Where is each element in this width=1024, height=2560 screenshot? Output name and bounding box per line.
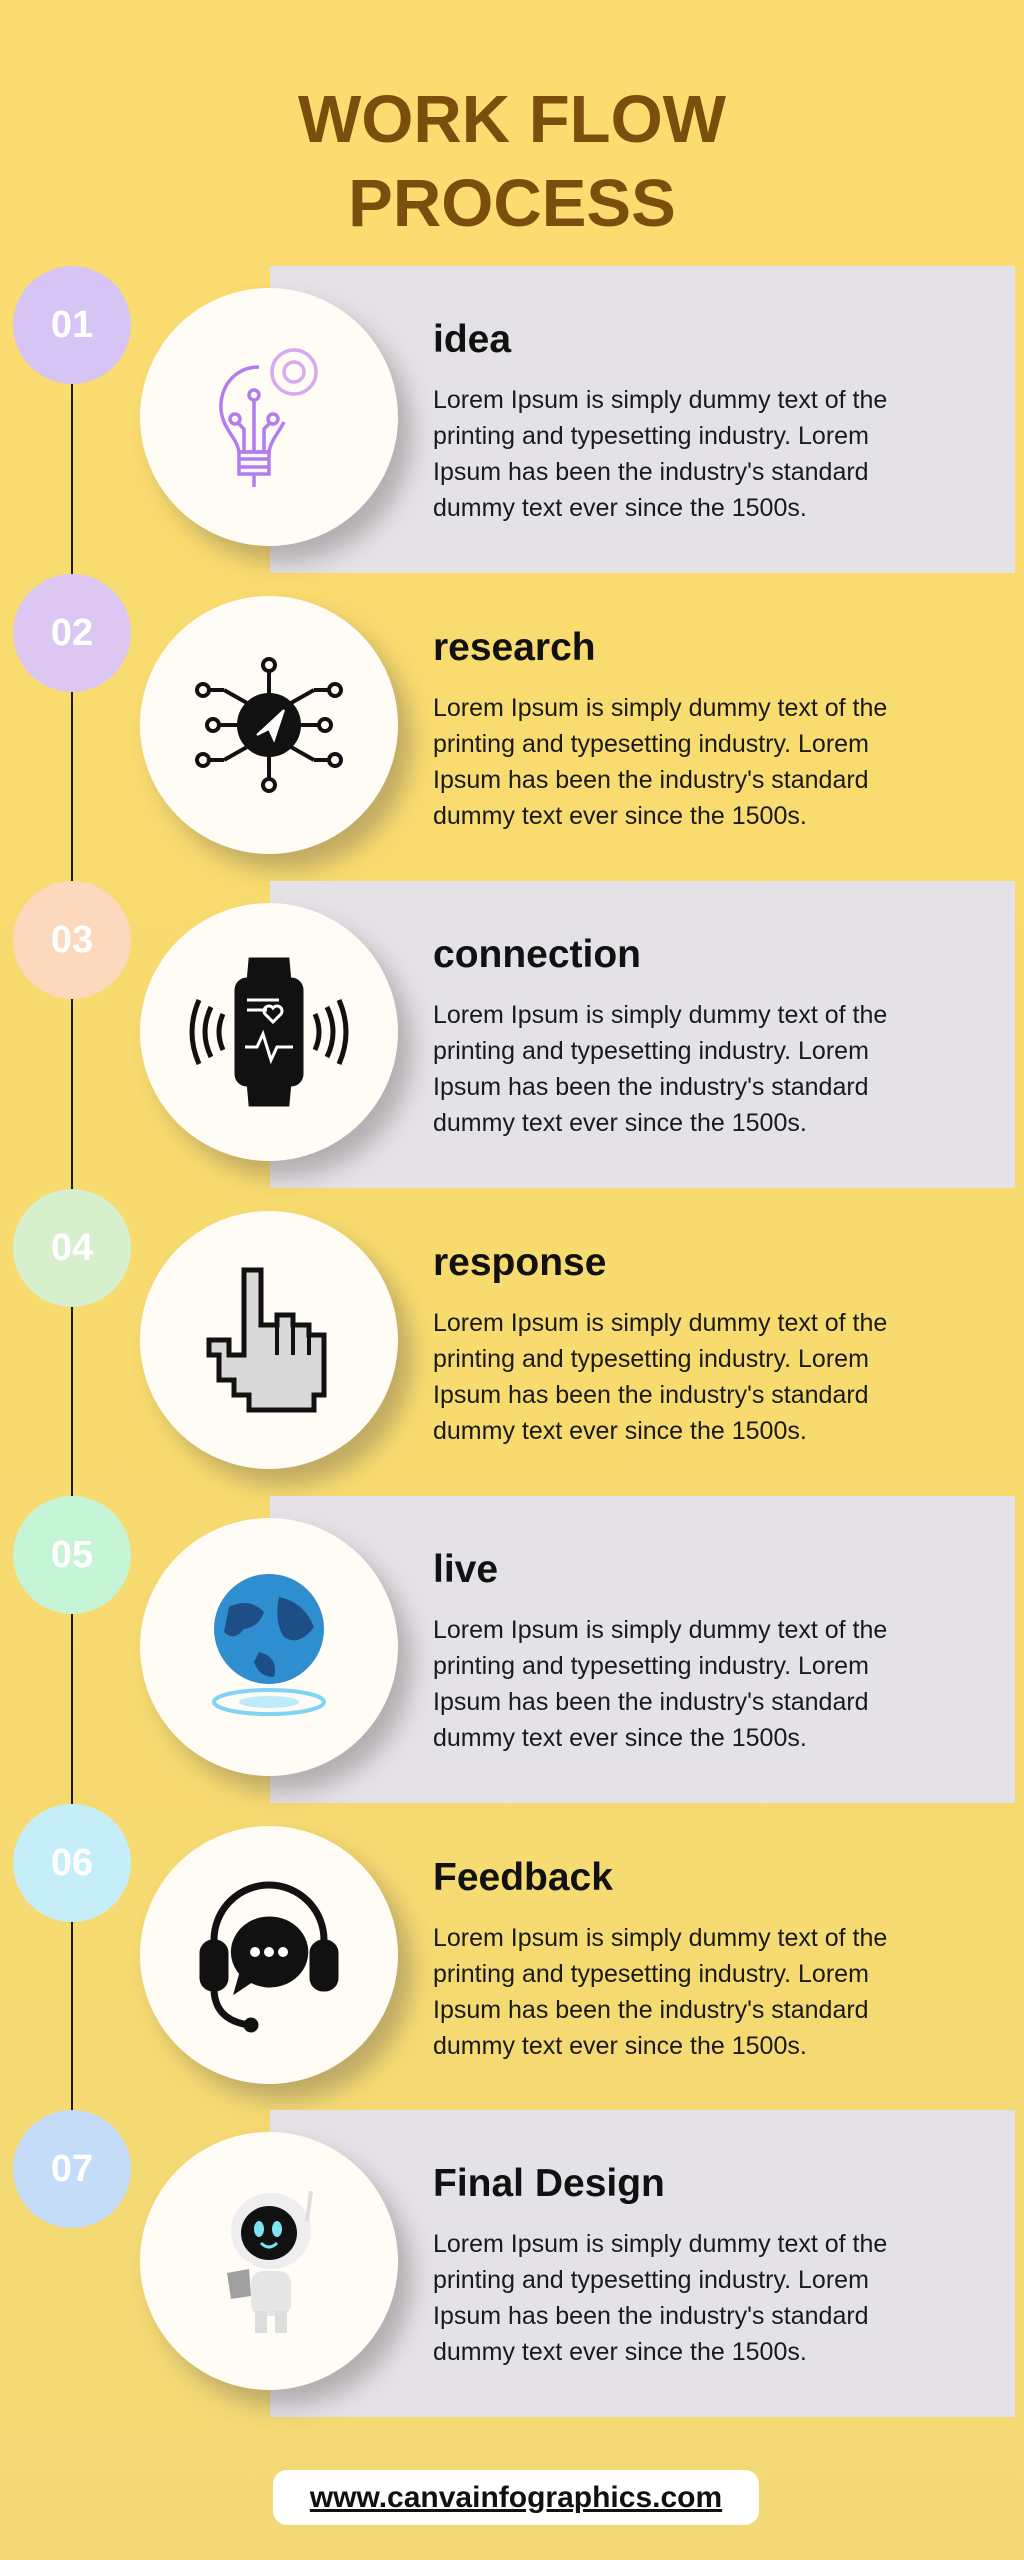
icon: smartwatch [140,903,398,1161]
number badge 01 [13,266,131,384]
heading: research [433,626,596,668]
number badge 03: 03 [51,919,93,961]
heading: Final Design [433,2162,665,2205]
body text: Lorem Ipsum is simply dummy text of the printing and typesetting industry. Lorem Ipsum has been the industry's standard dummy text ever since the 1500s. [433,1616,887,1752]
body text: Lorem Ipsum is simply dummy text of the printing and typesetting industry. Lorem Ipsum has been the industry's standard dummy text ever since the 1500s. [433,386,887,522]
heading: idea [433,318,511,361]
heading: Feedback [433,1856,613,1898]
number badge 02 [13,574,131,692]
number badge 07 [13,2110,131,2228]
number badge 06: 06 [51,1842,93,1884]
row 7: Final Design [13,2110,1015,2417]
number badge 02: 02 [51,612,93,654]
number badge 05: 05 [51,1534,93,1576]
number badge 06 [13,1804,131,1922]
panel background [270,881,1015,1188]
row 3: connection [13,881,1015,1188]
footer url [273,2470,759,2525]
title: WORK FLOW [298,82,726,157]
body text: Lorem Ipsum is simply dummy text of the printing and typesetting industry. Lorem Ipsum has been the industry's standard dummy text ever since the 1500s. [433,1001,887,1137]
number badge 05 [13,1496,131,1614]
heading: response [433,1240,606,1284]
icon: headset chat [140,1826,398,2084]
number badge 07: 07 [51,2148,93,2190]
footer url: www.canvainfographics.com [310,2481,722,2514]
title [298,82,726,241]
icon: pixel hand cursor [140,1210,398,1468]
row 6: Feedback [13,1804,887,2110]
body text: Lorem Ipsum is simply dummy text of the printing and typesetting industry. Lorem Ipsum has been the industry's standard dummy text ever since the 1500s. [433,1308,887,1444]
timeline line [71,380,73,2120]
icon: holographic globe [140,1518,398,1776]
row 4: response [13,1189,887,1496]
number badge 04: 04 [51,1226,93,1268]
row 2: research [13,574,887,881]
body text: Lorem Ipsum is simply dummy text of the printing and typesetting industry. Lorem Ipsum has been the industry's standard dummy text ever since the 1500s. [433,694,887,830]
panel background [270,2110,1015,2417]
heading: live [433,1548,498,1591]
icon: lightbulb with gear [140,288,398,546]
panel background [270,1496,1015,1803]
row 5: live [13,1496,1015,1803]
body text: Lorem Ipsum is simply dummy text of the printing and typesetting industry. Lorem Ipsum has been the industry's standard dummy text ever since the 1500s. [433,2230,887,2366]
row 1: idea [13,266,1015,573]
panel background [270,266,1015,573]
number badge 04 [13,1188,131,1306]
body text: Lorem Ipsum is simply dummy text of the printing and typesetting industry. Lorem Ipsum has been the industry's standard dummy text ever since the 1500s. [433,1924,887,2060]
number badge 03 [13,881,131,999]
icon: robot with laptop [140,2132,398,2390]
heading: connection [433,933,641,976]
number badge 01: 01 [51,304,93,346]
title: PROCESS [348,166,676,241]
icon: network navigation [140,596,398,854]
